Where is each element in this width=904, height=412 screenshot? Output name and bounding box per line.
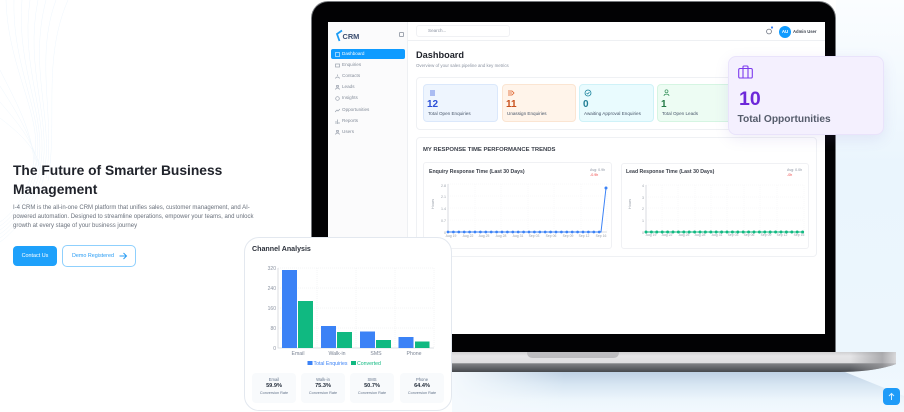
button: demo registered: Demo Registered <box>72 253 114 259</box>
line chart: lead: Aug 28 <box>695 233 705 237</box>
nav: opportunities: Opportunities <box>342 107 369 112</box>
stat: phone <box>400 373 444 403</box>
stat: email: 59.9% <box>266 383 282 389</box>
KPI: unassign enquiries <box>502 84 576 122</box>
value: 12 <box>427 99 438 110</box>
chart delta: lead: Avg: 0.0h <box>787 168 802 172</box>
label: Total Opportunities <box>738 114 831 125</box>
KPI: awaiting approval <box>579 84 654 122</box>
avatar <box>779 26 791 38</box>
line chart: enquiry: Sep 09 <box>563 234 573 238</box>
line chart: lead: Aug 25 <box>679 233 689 237</box>
label: Awaiting Approval Enquiries <box>584 111 641 116</box>
value: 1 <box>661 99 667 110</box>
line chart: lead: 1 <box>642 219 644 223</box>
chart delta: lead <box>787 168 802 177</box>
line chart: enquiry: 0.7 <box>441 219 446 223</box>
stat: email <box>252 373 296 403</box>
laptop bezel <box>311 1 836 352</box>
KPI panel <box>416 77 817 130</box>
stat: walk-in <box>301 373 345 403</box>
user name: Admin User <box>793 29 817 34</box>
channel analysis heading: Channel Analysis <box>252 245 311 253</box>
line chart: lead: Sep 06 <box>744 233 754 237</box>
bar chart: channel analysis: Walk-in <box>328 351 346 357</box>
bar chart: channel analysis: 240 <box>268 286 276 292</box>
bar chart: channel analysis: Phone <box>406 351 422 357</box>
nav: reports <box>336 118 358 124</box>
chart delta: enquiry <box>590 168 605 177</box>
line chart: enquiry: 0 <box>444 231 446 235</box>
KPI: total open enquiries <box>423 84 498 122</box>
nav: users <box>335 129 354 135</box>
floating card: total opportunities <box>728 56 884 135</box>
icon <box>508 90 514 96</box>
line chart: enquiry: 2.1 <box>441 195 446 199</box>
stat: sms: SMS <box>367 377 377 382</box>
line chart: lead: Sep 03 <box>728 233 738 237</box>
line chart: lead: Aug 31 <box>712 233 722 237</box>
label: Total Open Enquiries <box>428 111 471 116</box>
notification icon <box>766 26 774 34</box>
bar chart: channel analysis: 320 <box>268 266 276 272</box>
avatar: AU <box>782 29 788 34</box>
line chart: enquiry: 2.8 <box>441 184 446 188</box>
value: 0 <box>583 99 589 110</box>
line chart: lead: Aug 22 <box>662 233 672 237</box>
line chart: enquiry: 1.4 <box>441 207 446 211</box>
stat: walk-in: Conversion Rate <box>309 391 337 395</box>
stat: email: Email <box>269 377 279 382</box>
bar chart: channel analysis <box>268 266 434 367</box>
hero description: growth at every stage of your business journey <box>13 223 137 229</box>
nav: dashboard active: Dashboard <box>342 51 364 56</box>
hero description <box>13 204 254 229</box>
page title: Dashboard <box>416 50 464 60</box>
logo <box>336 30 359 42</box>
stat: sms: 50.7% <box>364 383 380 389</box>
laptop screen: CRM dashboard <box>328 22 825 334</box>
trends heading: MY RESPONSE TIME PERFORMANCE TRENDS <box>423 147 555 153</box>
hero heading <box>13 162 222 197</box>
bar chart: channel analysis: 80 <box>270 326 276 332</box>
sidebar <box>328 22 408 334</box>
bar chart: channel analysis: SMS <box>370 351 382 357</box>
line chart: enquiry: Aug 25 <box>479 234 489 238</box>
bar chart: channel analysis: Converted <box>357 361 381 367</box>
chart delta: enquiry: Avg: 0.9h <box>590 168 605 172</box>
nav: dashboard active <box>331 49 405 59</box>
nav: contacts: Contacts <box>342 73 360 78</box>
button: contact us <box>13 246 57 266</box>
bar chart: channel analysis: 160 <box>268 306 276 312</box>
chart title: lead: Lead Response Time (Last 30 Days) <box>626 169 714 175</box>
hero description: I-4 CRM is the all-in-one CRM platform that unifies sales, customer management, and AI- <box>13 205 250 211</box>
nav: insights <box>335 95 358 101</box>
chart card: lead response time <box>621 163 809 249</box>
collapse icon <box>399 32 404 37</box>
line chart: enquiry: Sep 12 <box>579 234 589 238</box>
line chart: lead: Sep 09 <box>761 233 771 237</box>
chart delta: enquiry: -0.9h <box>590 173 598 177</box>
line chart: enquiry: Hours <box>431 199 435 209</box>
hero heading: The Future of Smarter Business <box>13 162 222 178</box>
stat: email: Conversion Rate <box>260 391 288 395</box>
icon <box>664 90 670 96</box>
line chart: lead: Hours <box>628 199 632 209</box>
trends panel <box>416 137 817 257</box>
stat: phone: Conversion Rate <box>408 391 436 395</box>
value: 10 <box>739 88 761 110</box>
top bar <box>408 22 825 41</box>
line chart: lead: Sep 12 <box>777 233 787 237</box>
scroll to top button <box>883 388 900 405</box>
nav: insights: Insights <box>342 95 358 100</box>
line chart: enquiry: Aug 19 <box>446 234 456 238</box>
hero heading: Management <box>13 182 97 196</box>
label: Unassign Enquiries <box>507 111 547 116</box>
stat: walk-in: 75.3% <box>315 383 331 389</box>
nav: contacts <box>335 73 360 79</box>
nav: reports: Reports <box>342 118 358 123</box>
KPI: total open leads <box>657 84 733 122</box>
logo: CRM <box>342 32 359 41</box>
line chart: enquiry: Sep 06 <box>546 234 556 238</box>
stat: walk-in: Walk-in <box>316 377 330 382</box>
line chart: lead <box>628 184 804 237</box>
stat: sms <box>350 373 394 403</box>
line chart: lead: 0 <box>642 231 644 235</box>
bar chart: channel analysis: Email <box>292 351 304 357</box>
line chart: lead: 2 <box>642 207 644 211</box>
laptop base <box>452 352 896 372</box>
line chart: lead: Sep 16 <box>794 233 804 237</box>
hero description: powered automation. Designed to streamline operations, empower your teams, and unlock <box>13 214 253 220</box>
icon: briefcase <box>738 66 753 78</box>
icon <box>430 90 435 96</box>
chart delta: lead: -0h <box>787 173 792 177</box>
line chart: enquiry: Sep 16 <box>596 234 606 238</box>
nav: leads <box>335 84 355 90</box>
label: Total Open Leads <box>662 111 698 116</box>
line chart: lead: Aug 19 <box>646 233 656 237</box>
chart title: enquiry: Enquiry Response Time (Last 30 Days) <box>429 169 525 175</box>
line chart: enquiry: Aug 22 <box>463 234 473 238</box>
stat: phone: 64.4% <box>414 383 430 389</box>
stat: phone: Phone <box>416 377 428 382</box>
nav: leads: Leads <box>342 84 355 89</box>
icon <box>584 90 592 96</box>
button: demo registered <box>62 245 136 267</box>
line chart: enquiry: Aug 28 <box>496 234 506 238</box>
page subtitle: Overview of your sales pipeline and key metrics <box>416 63 509 68</box>
search box <box>416 25 510 37</box>
line chart: enquiry: Sep 03 <box>529 234 539 238</box>
stat: sms: Conversion Rate <box>358 391 386 395</box>
line chart: enquiry <box>431 184 608 238</box>
bar chart: channel analysis: Total Enquiries <box>314 361 348 367</box>
line chart: lead: 3 <box>642 196 644 200</box>
value: 11 <box>506 99 517 110</box>
search box: Search... <box>428 28 446 33</box>
floating card: channel analysis <box>244 237 452 411</box>
button: contact us: Contact Us <box>22 253 48 259</box>
chart card: enquiry response time <box>423 162 612 249</box>
nav: enquiries: Enquiries <box>342 62 361 67</box>
nav: enquiries <box>335 62 361 68</box>
nav: users: Users <box>342 129 354 134</box>
bar chart: channel analysis: 0 <box>273 346 276 352</box>
line chart: enquiry: Aug 31 <box>513 234 523 238</box>
line chart: lead: 4 <box>642 184 644 188</box>
